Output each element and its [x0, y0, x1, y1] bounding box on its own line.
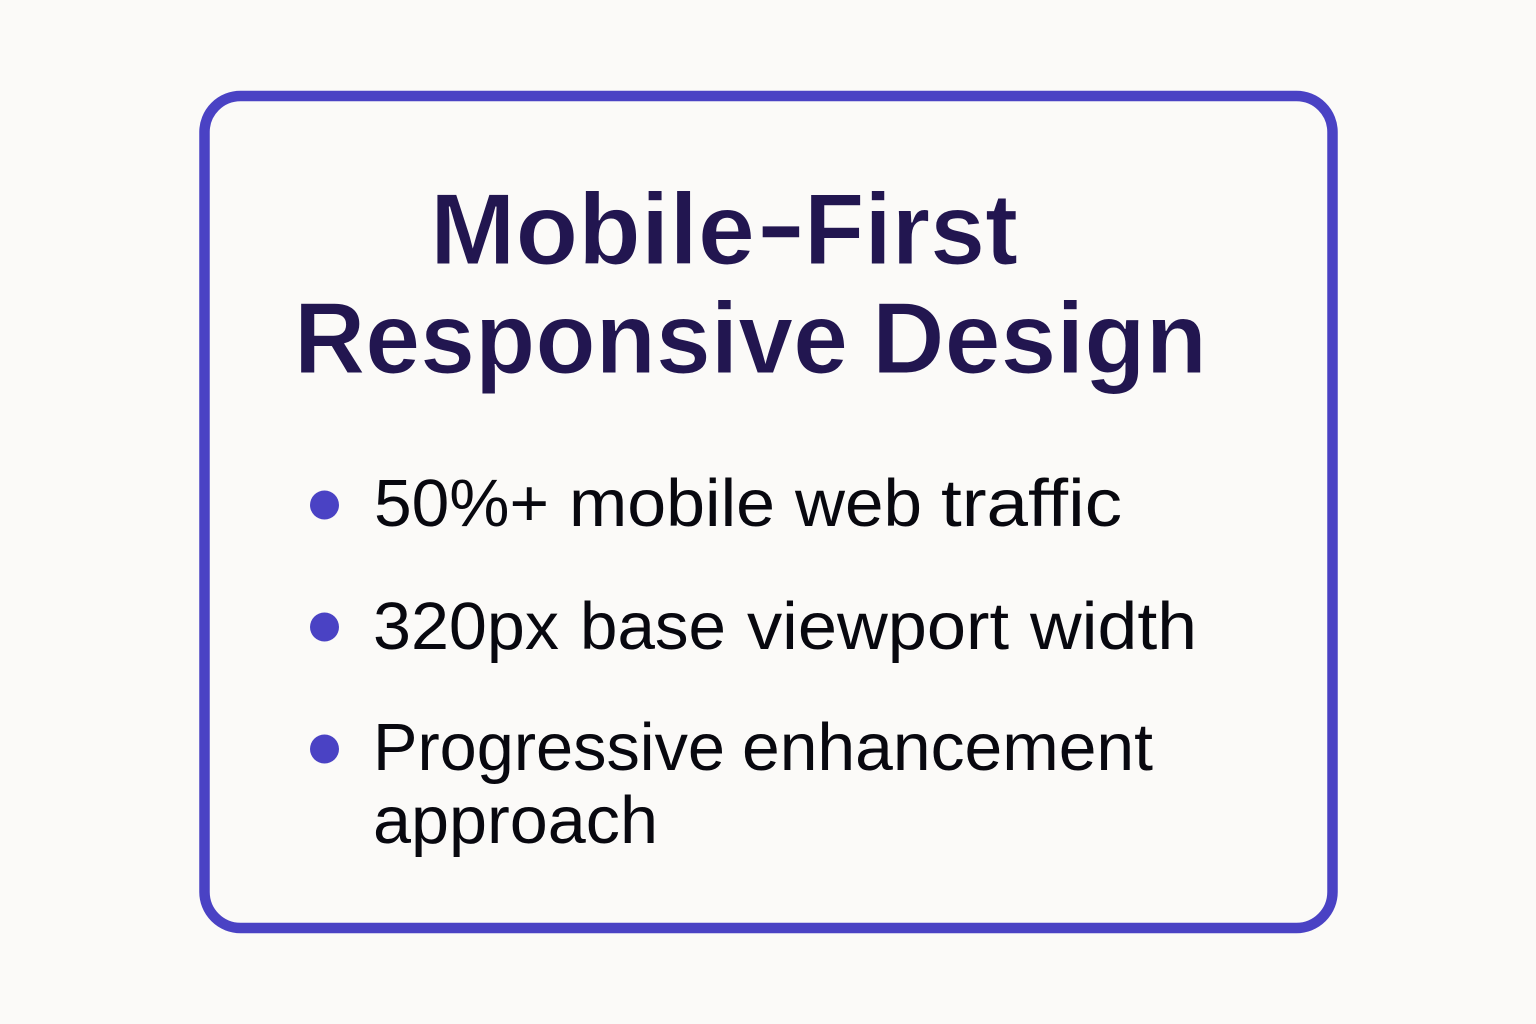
heading: [294, 168, 1207, 395]
panel: card: [204, 96, 1332, 928]
heading: First: [804, 174, 1018, 286]
bullet item: mobile traffic: mobile: [569, 466, 775, 541]
bullet item: progressive enhancement: enhancement: [742, 710, 1153, 785]
bullet item: mobile traffic: traffic: [941, 466, 1122, 541]
bullet item: viewport width: 320px: [373, 589, 559, 664]
bullet item: mobile traffic: 50%+: [374, 466, 549, 541]
bullet item: mobile traffic: web: [794, 466, 922, 541]
heading: -: [756, 168, 806, 280]
bullet item: viewport width: width: [1029, 589, 1197, 664]
heading: Design: [872, 283, 1207, 395]
bullet item: viewport width: [310, 589, 1197, 664]
bullet item: viewport width: viewport: [747, 589, 1009, 664]
heading: Mobile: [430, 174, 755, 286]
bullet item: progressive enhancement: Progressive: [373, 710, 725, 785]
bullet item: viewport width: base: [580, 589, 726, 664]
bullet item: mobile traffic: [310, 466, 1122, 541]
bullet item: progressive enhancement: approach: [373, 783, 658, 858]
heading: Responsive: [294, 283, 848, 395]
bullet item: progressive enhancement: [310, 710, 1153, 858]
